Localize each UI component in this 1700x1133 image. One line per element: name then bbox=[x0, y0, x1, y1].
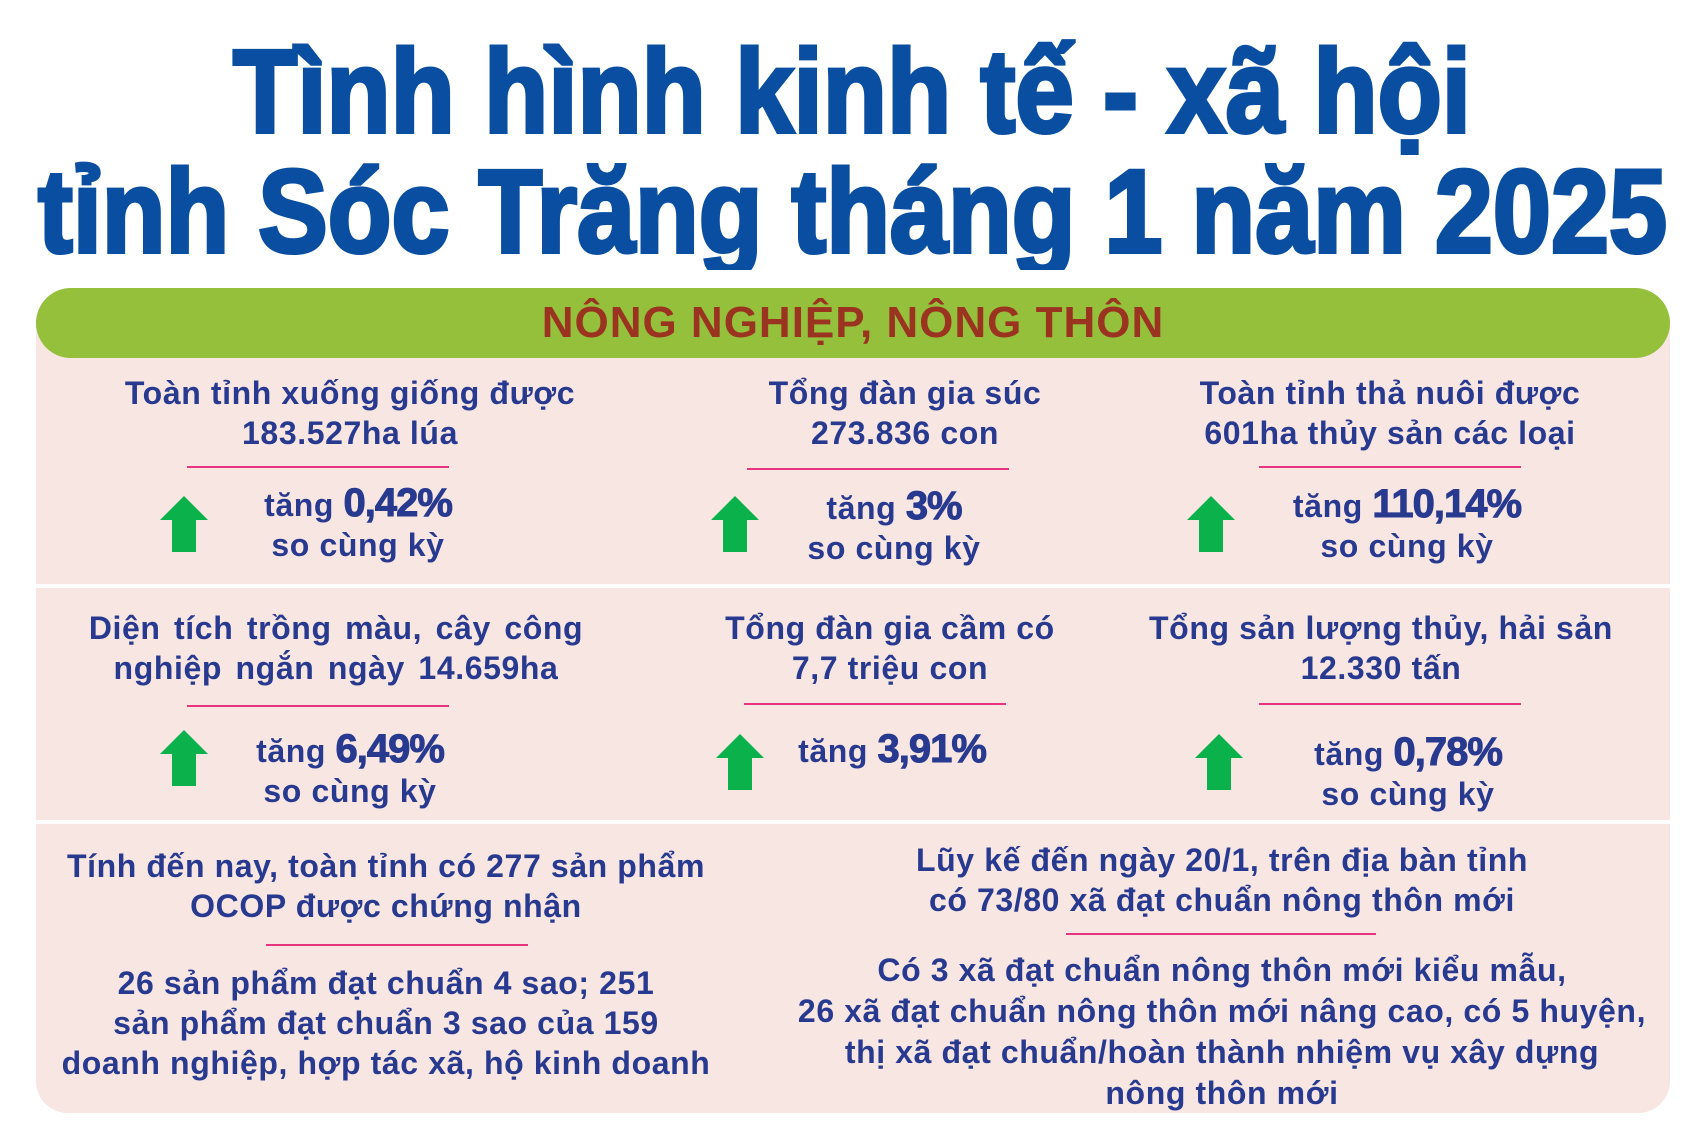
panel: content background bbox=[36, 320, 1670, 1113]
text: so cùng kỳ bbox=[263, 773, 437, 809]
icon: arrow up bbox=[160, 496, 208, 552]
stat: seafood output: 12.330 tấn bbox=[1301, 650, 1461, 686]
text: 26 sản phẩm đạt chuẩn 4 sao; 251 bbox=[118, 965, 654, 1001]
text: sản phẩm đạt chuẩn 3 sao của 159 bbox=[113, 1005, 659, 1041]
text: tăng 0,78% bbox=[1314, 730, 1502, 774]
icon: arrow up bbox=[1195, 734, 1243, 790]
icon: arrow up bbox=[1187, 496, 1235, 552]
text block: new rural: có 73/80 xã đạt chuẩn nông thôn mới bbox=[929, 882, 1515, 918]
icon: arrow up bbox=[711, 496, 759, 552]
stat: seafood output: Tổng sản lượng thủy, hải sản bbox=[1149, 610, 1613, 646]
heading band: NÔNG NGHIỆP, NÔNG THÔN bbox=[542, 298, 1164, 347]
stat: aquaculture: Toàn tỉnh thả nuôi được bbox=[1200, 375, 1580, 411]
text block: OCOP bbox=[67, 848, 705, 924]
text: so cùng kỳ bbox=[1320, 528, 1494, 564]
text: tăng 0,42% bbox=[264, 481, 452, 525]
title: Tình hình kinh tế - xã hội bbox=[233, 26, 1471, 158]
stat: rice: Toàn tỉnh xuống giống được bbox=[125, 375, 575, 411]
stat: crops: Diện tích trồng màu, cây công bbox=[89, 610, 583, 646]
text: tăng 3,91% bbox=[798, 727, 986, 771]
stat: crops bbox=[89, 610, 583, 686]
text: Có 3 xã đạt chuẩn nông thôn mới kiểu mẫu, bbox=[877, 952, 1567, 988]
text: tăng 3% bbox=[826, 484, 962, 528]
stat: aquaculture: 601ha thủy sản các loại bbox=[1204, 415, 1576, 451]
stat: rice bbox=[125, 375, 575, 451]
stat: cattle bbox=[769, 375, 1041, 451]
text: 26 xã đạt chuẩn nông thôn mới nâng cao, có 5 huyện, bbox=[798, 993, 1646, 1029]
text: nông thôn mới bbox=[1105, 1075, 1339, 1111]
title bbox=[38, 26, 1667, 270]
icon: arrow up bbox=[160, 730, 208, 786]
stat: cattle: Tổng đàn gia súc bbox=[769, 375, 1041, 411]
text block: new rural bbox=[916, 842, 1528, 918]
stat: seafood output bbox=[1149, 610, 1613, 686]
text: so cùng kỳ bbox=[1321, 776, 1495, 812]
stat: cattle: 273.836 con bbox=[811, 415, 999, 451]
heading band bbox=[36, 288, 1670, 358]
text block: OCOP: OCOP được chứng nhận bbox=[190, 888, 582, 924]
text: doanh nghiệp, hợp tác xã, hộ kinh doanh bbox=[62, 1045, 710, 1081]
text block: OCOP: Tính đến nay, toàn tỉnh có 277 sản phẩm bbox=[67, 848, 705, 884]
text: tăng 6,49% bbox=[256, 727, 444, 771]
stat: rice: 183.527ha lúa bbox=[242, 415, 458, 451]
stat: crops: nghiệp ngắn ngày 14.659ha bbox=[114, 650, 558, 686]
stat: aquaculture bbox=[1200, 375, 1580, 451]
text: so cùng kỳ bbox=[807, 530, 981, 566]
text: so cùng kỳ bbox=[271, 527, 445, 563]
text block: new rural: Lũy kế đến ngày 20/1, trên địa bàn tỉnh bbox=[916, 842, 1528, 878]
stat: poultry: 7,7 triệu con bbox=[792, 650, 988, 686]
text: thị xã đạt chuẩn/hoàn thành nhiệm vụ xây dựng bbox=[845, 1034, 1599, 1070]
icon: arrow up bbox=[716, 734, 764, 790]
stat: poultry bbox=[725, 610, 1055, 686]
text: tăng 110,14% bbox=[1293, 482, 1521, 526]
stat: poultry: Tổng đàn gia cầm có bbox=[725, 610, 1055, 646]
